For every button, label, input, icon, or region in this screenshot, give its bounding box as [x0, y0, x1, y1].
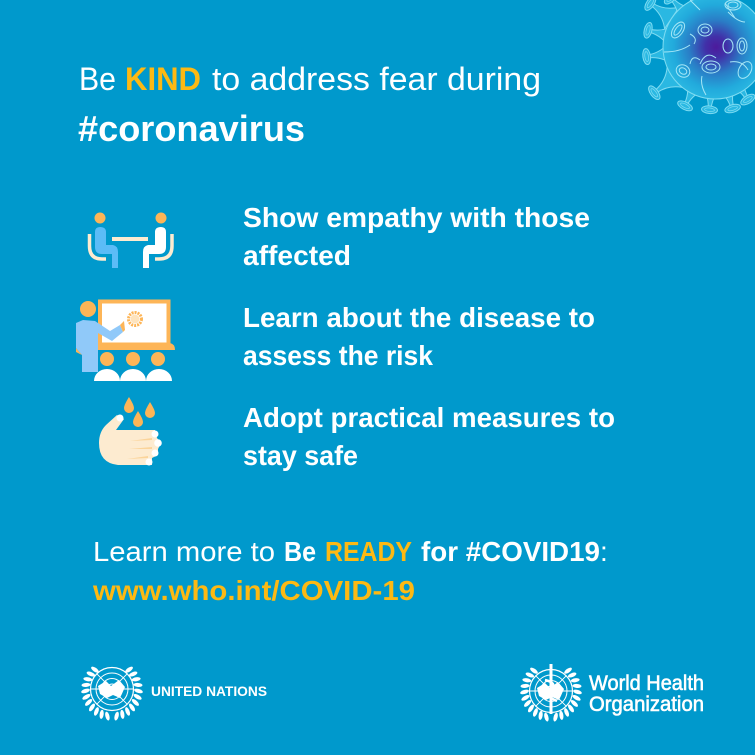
text: united nations: UNITED NATIONS: [151, 684, 267, 699]
text: world health organization: World Health: [589, 671, 704, 695]
call to action: [92, 536, 608, 606]
text: learn about the disease: Learn about the disease to: [243, 302, 595, 333]
text: world health organization: [589, 671, 704, 716]
icon: two people talking at a table: [90, 212, 172, 268]
text: adopt practical measures: [243, 402, 615, 471]
logo: World Health Organization: [520, 664, 704, 722]
text: world health organization: Organization: [589, 692, 704, 716]
text: show empathy: affected: [243, 240, 351, 271]
call to action: READY: [325, 536, 412, 567]
icon: presenter at a board with audience: [76, 301, 175, 381]
text: learn about the disease: assess the risk: [243, 340, 433, 371]
call to action: :: [600, 536, 608, 567]
text: adopt practical measures: Adopt practical measures to: [243, 402, 615, 433]
icon: hand with water drops: [99, 397, 162, 466]
title: KIND: [125, 61, 201, 97]
title: to address fear during: [212, 61, 541, 97]
text: adopt practical measures: stay safe: [243, 440, 358, 471]
title: Be: [79, 61, 116, 97]
title: [78, 61, 541, 149]
title: #coronavirus: [78, 108, 305, 149]
text: show empathy: [243, 202, 590, 271]
text: learn about the disease: [243, 302, 595, 371]
logo: United Nations: [81, 665, 267, 721]
call to action: Learn more to: [93, 536, 275, 567]
virus illustration: [640, 0, 755, 116]
call to action: Be: [284, 536, 316, 567]
text: show empathy: Show empathy with those: [243, 202, 590, 233]
call to action: for #COVID19: [421, 536, 600, 567]
call to action: www.who.int/COVID-19: [92, 575, 415, 606]
